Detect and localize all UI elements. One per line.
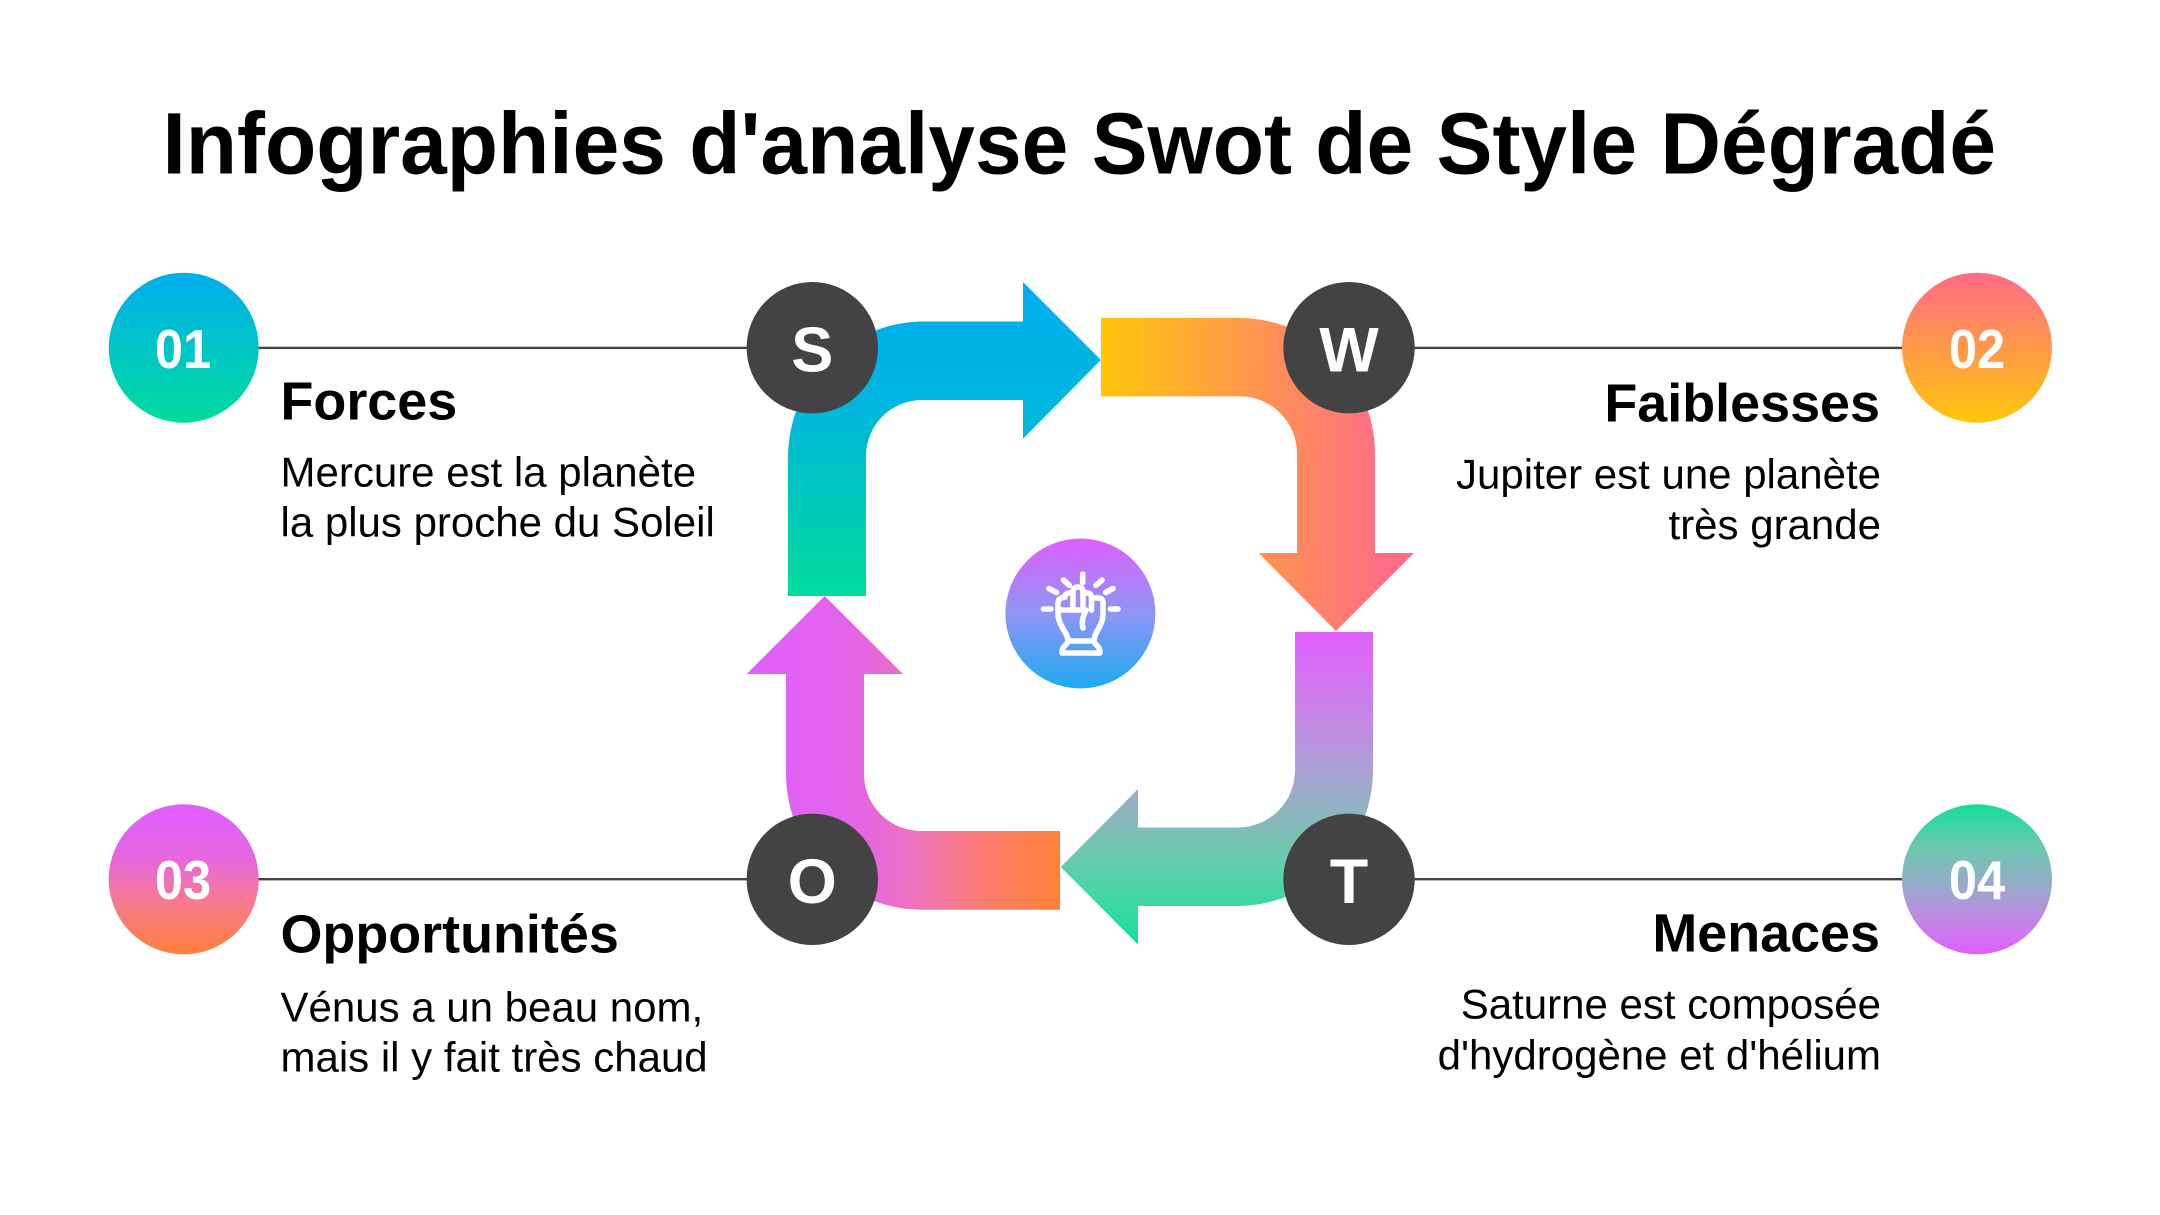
text block: Menaces: [1438, 904, 1881, 1078]
arrow: S to W: [788, 282, 1101, 596]
letter circle: S: [747, 282, 878, 413]
text block: Faiblesses: Faiblesses: [1604, 374, 1880, 434]
text block: Faiblesses: Jupiter est une planète: [1456, 450, 1881, 497]
text block: Opportunités: Vénus a un beau nom,: [280, 984, 703, 1031]
text block: Menaces: Menaces: [1652, 904, 1880, 964]
connector line: menaces: [1411, 878, 1906, 880]
number badge: 01: [109, 273, 259, 423]
letter circle: O: O: [788, 847, 837, 917]
connector line: opportunités: [258, 878, 750, 880]
arrow: T to O: [1061, 632, 1373, 945]
letter circle: W: W: [1319, 316, 1379, 386]
text block: Forces: Forces: [280, 371, 457, 431]
text block: Menaces: d'hydrogène et d'hélium: [1438, 1031, 1881, 1078]
arrow: W to T: [1101, 318, 1414, 631]
text block: Faiblesses: [1456, 374, 1881, 548]
letter circle: W: [1283, 282, 1415, 413]
text block: Menaces: Saturne est composée: [1461, 980, 1881, 1027]
text block: Forces: Mercure est la planète: [280, 449, 696, 496]
connector line: faiblesses: [1411, 347, 1906, 349]
letter circle: S: S: [791, 316, 833, 386]
number badge: 01: 01: [155, 319, 211, 380]
icon: raised fist: [1044, 574, 1118, 653]
arrow: O to S: [747, 596, 1060, 910]
text block: Opportunités: mais il y fait très chaud: [280, 1034, 708, 1081]
text block: Forces: [280, 371, 715, 546]
text block: Opportunités: [280, 904, 708, 1081]
text block: Forces: la plus proche du Soleil: [280, 499, 715, 546]
text block: Opportunités: Opportunités: [280, 904, 619, 964]
center circle with fist icon: [1005, 538, 1155, 688]
number badge: 03: [109, 804, 259, 954]
connector line: forces: [258, 347, 750, 349]
number badge: 02: 02: [1949, 319, 2005, 380]
number badge: 03: 03: [155, 850, 211, 911]
number badge: 04: [1902, 804, 2052, 954]
text block: Faiblesses: très grande: [1669, 501, 1881, 548]
number badge: 04: 04: [1949, 850, 2006, 911]
letter circle: T: [1283, 814, 1415, 945]
number badge: 02: [1902, 273, 2052, 423]
title: Infographies d'analyse Swot de Style Dégradé: [162, 96, 1996, 193]
letter circle: O: [747, 814, 878, 945]
letter circle: T: T: [1330, 847, 1368, 917]
